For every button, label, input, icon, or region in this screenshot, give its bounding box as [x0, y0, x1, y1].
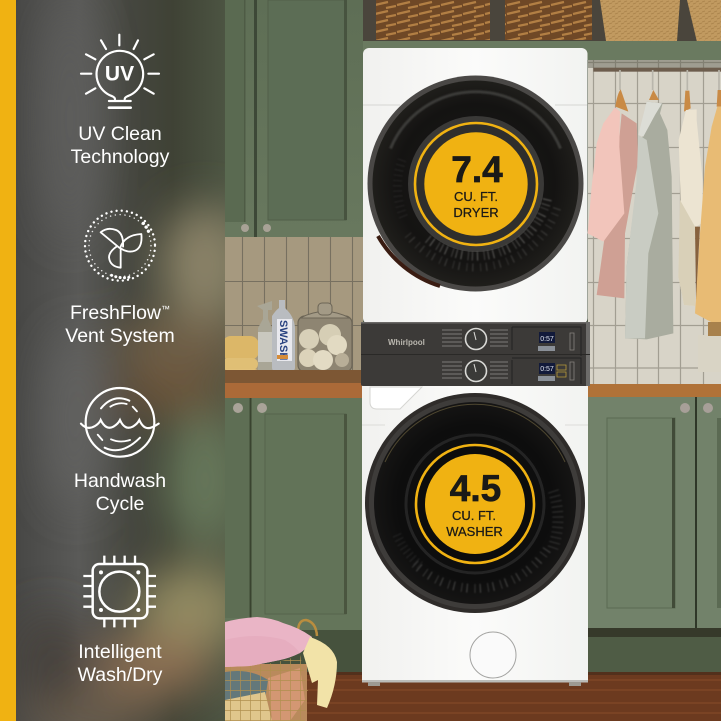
- brand: Whirlpool: [388, 338, 425, 347]
- toe kick left: [225, 630, 365, 674]
- counter right: [588, 384, 721, 397]
- dryer capacity badge: [415, 123, 537, 245]
- feature: UV Clean Technology: UV: [105, 62, 134, 86]
- glass jar: [298, 303, 352, 372]
- items on left counter: [222, 300, 352, 381]
- plaid shirt: [625, 102, 673, 339]
- scene background: wall: [225, 0, 721, 721]
- pink shirt: [588, 107, 638, 298]
- yellow accent bar: [0, 0, 16, 721]
- washer capacity badge: CU. FT.: [452, 508, 496, 523]
- feature: Handwash Cycle: Cycle: [96, 493, 144, 515]
- feature: UV Clean Technology: Technology: [71, 146, 170, 168]
- laundry basket: [225, 617, 337, 721]
- dryer capacity badge: CU. FT.: [454, 189, 498, 204]
- display upper: 0:57: [540, 336, 554, 343]
- control panel: [361, 322, 590, 386]
- cream shirt: [678, 109, 703, 306]
- label: Intelligent: [78, 641, 162, 663]
- baskets on shelf: [363, 0, 721, 42]
- shelf: [363, 41, 721, 60]
- left translucent panel: [16, 0, 225, 721]
- washer body: [362, 384, 588, 686]
- icon: UV bulb: [81, 35, 159, 108]
- feature: Intelligent Wash/Dry: Wash/Dry: [78, 664, 163, 686]
- dryer body: [363, 48, 588, 324]
- towels: [222, 336, 260, 381]
- counter left: [225, 370, 363, 398]
- upper cabinets left: [225, 0, 363, 237]
- yellow shirt: [695, 107, 721, 327]
- dryer capacity badge: DRYER: [453, 205, 499, 220]
- option lines: [442, 330, 508, 378]
- toe kick right: [588, 628, 721, 672]
- rail: [593, 68, 721, 72]
- lower cabinets right: [588, 397, 721, 628]
- washer capacity badge: 4.5: [450, 468, 501, 509]
- label: UV Clean: [78, 123, 162, 145]
- label: ™: [161, 304, 170, 314]
- feature: FreshFlow Vent System: Vent System: [65, 325, 175, 347]
- tiled wall right: [588, 60, 721, 385]
- feature: Intelligent Wash/Dry: [78, 556, 163, 686]
- display upper: [538, 332, 555, 351]
- washer drum: [365, 393, 585, 613]
- feature: Handwash Cycle: [74, 388, 166, 515]
- feature: FreshFlow Vent System: [65, 211, 175, 347]
- dial lower: [466, 360, 486, 382]
- hangers: [615, 70, 721, 112]
- washer round access panel: [470, 632, 516, 678]
- swash jug: SWASH: [277, 320, 289, 360]
- label: Handwash: [74, 470, 166, 492]
- yellow cloth: [303, 637, 337, 708]
- clothes rail with hanging clothes: [588, 68, 721, 339]
- dryer ribs: [397, 160, 558, 267]
- dryer drum: [368, 76, 584, 292]
- jar by wall right: [698, 322, 721, 372]
- lower cabinets left: [225, 398, 363, 630]
- display lower: [538, 363, 555, 381]
- washer ribs: [397, 490, 558, 588]
- display lower: 0:57: [540, 366, 554, 373]
- dryer capacity badge: 7.4: [451, 149, 503, 190]
- spray bottle: [257, 301, 272, 373]
- feature: UV Clean Technology: [71, 35, 170, 168]
- washer capacity badge: [416, 445, 534, 563]
- dial upper: [466, 328, 486, 350]
- label: FreshFlow: [70, 302, 161, 324]
- backsplash tiles left: [225, 237, 363, 372]
- washer capacity badge: WASHER: [446, 524, 503, 539]
- icon: water waves in circle: [81, 388, 159, 457]
- wood floor: [225, 672, 721, 721]
- icon: chip with drum: [83, 556, 156, 627]
- icon: fan in dotted circle: [85, 211, 155, 281]
